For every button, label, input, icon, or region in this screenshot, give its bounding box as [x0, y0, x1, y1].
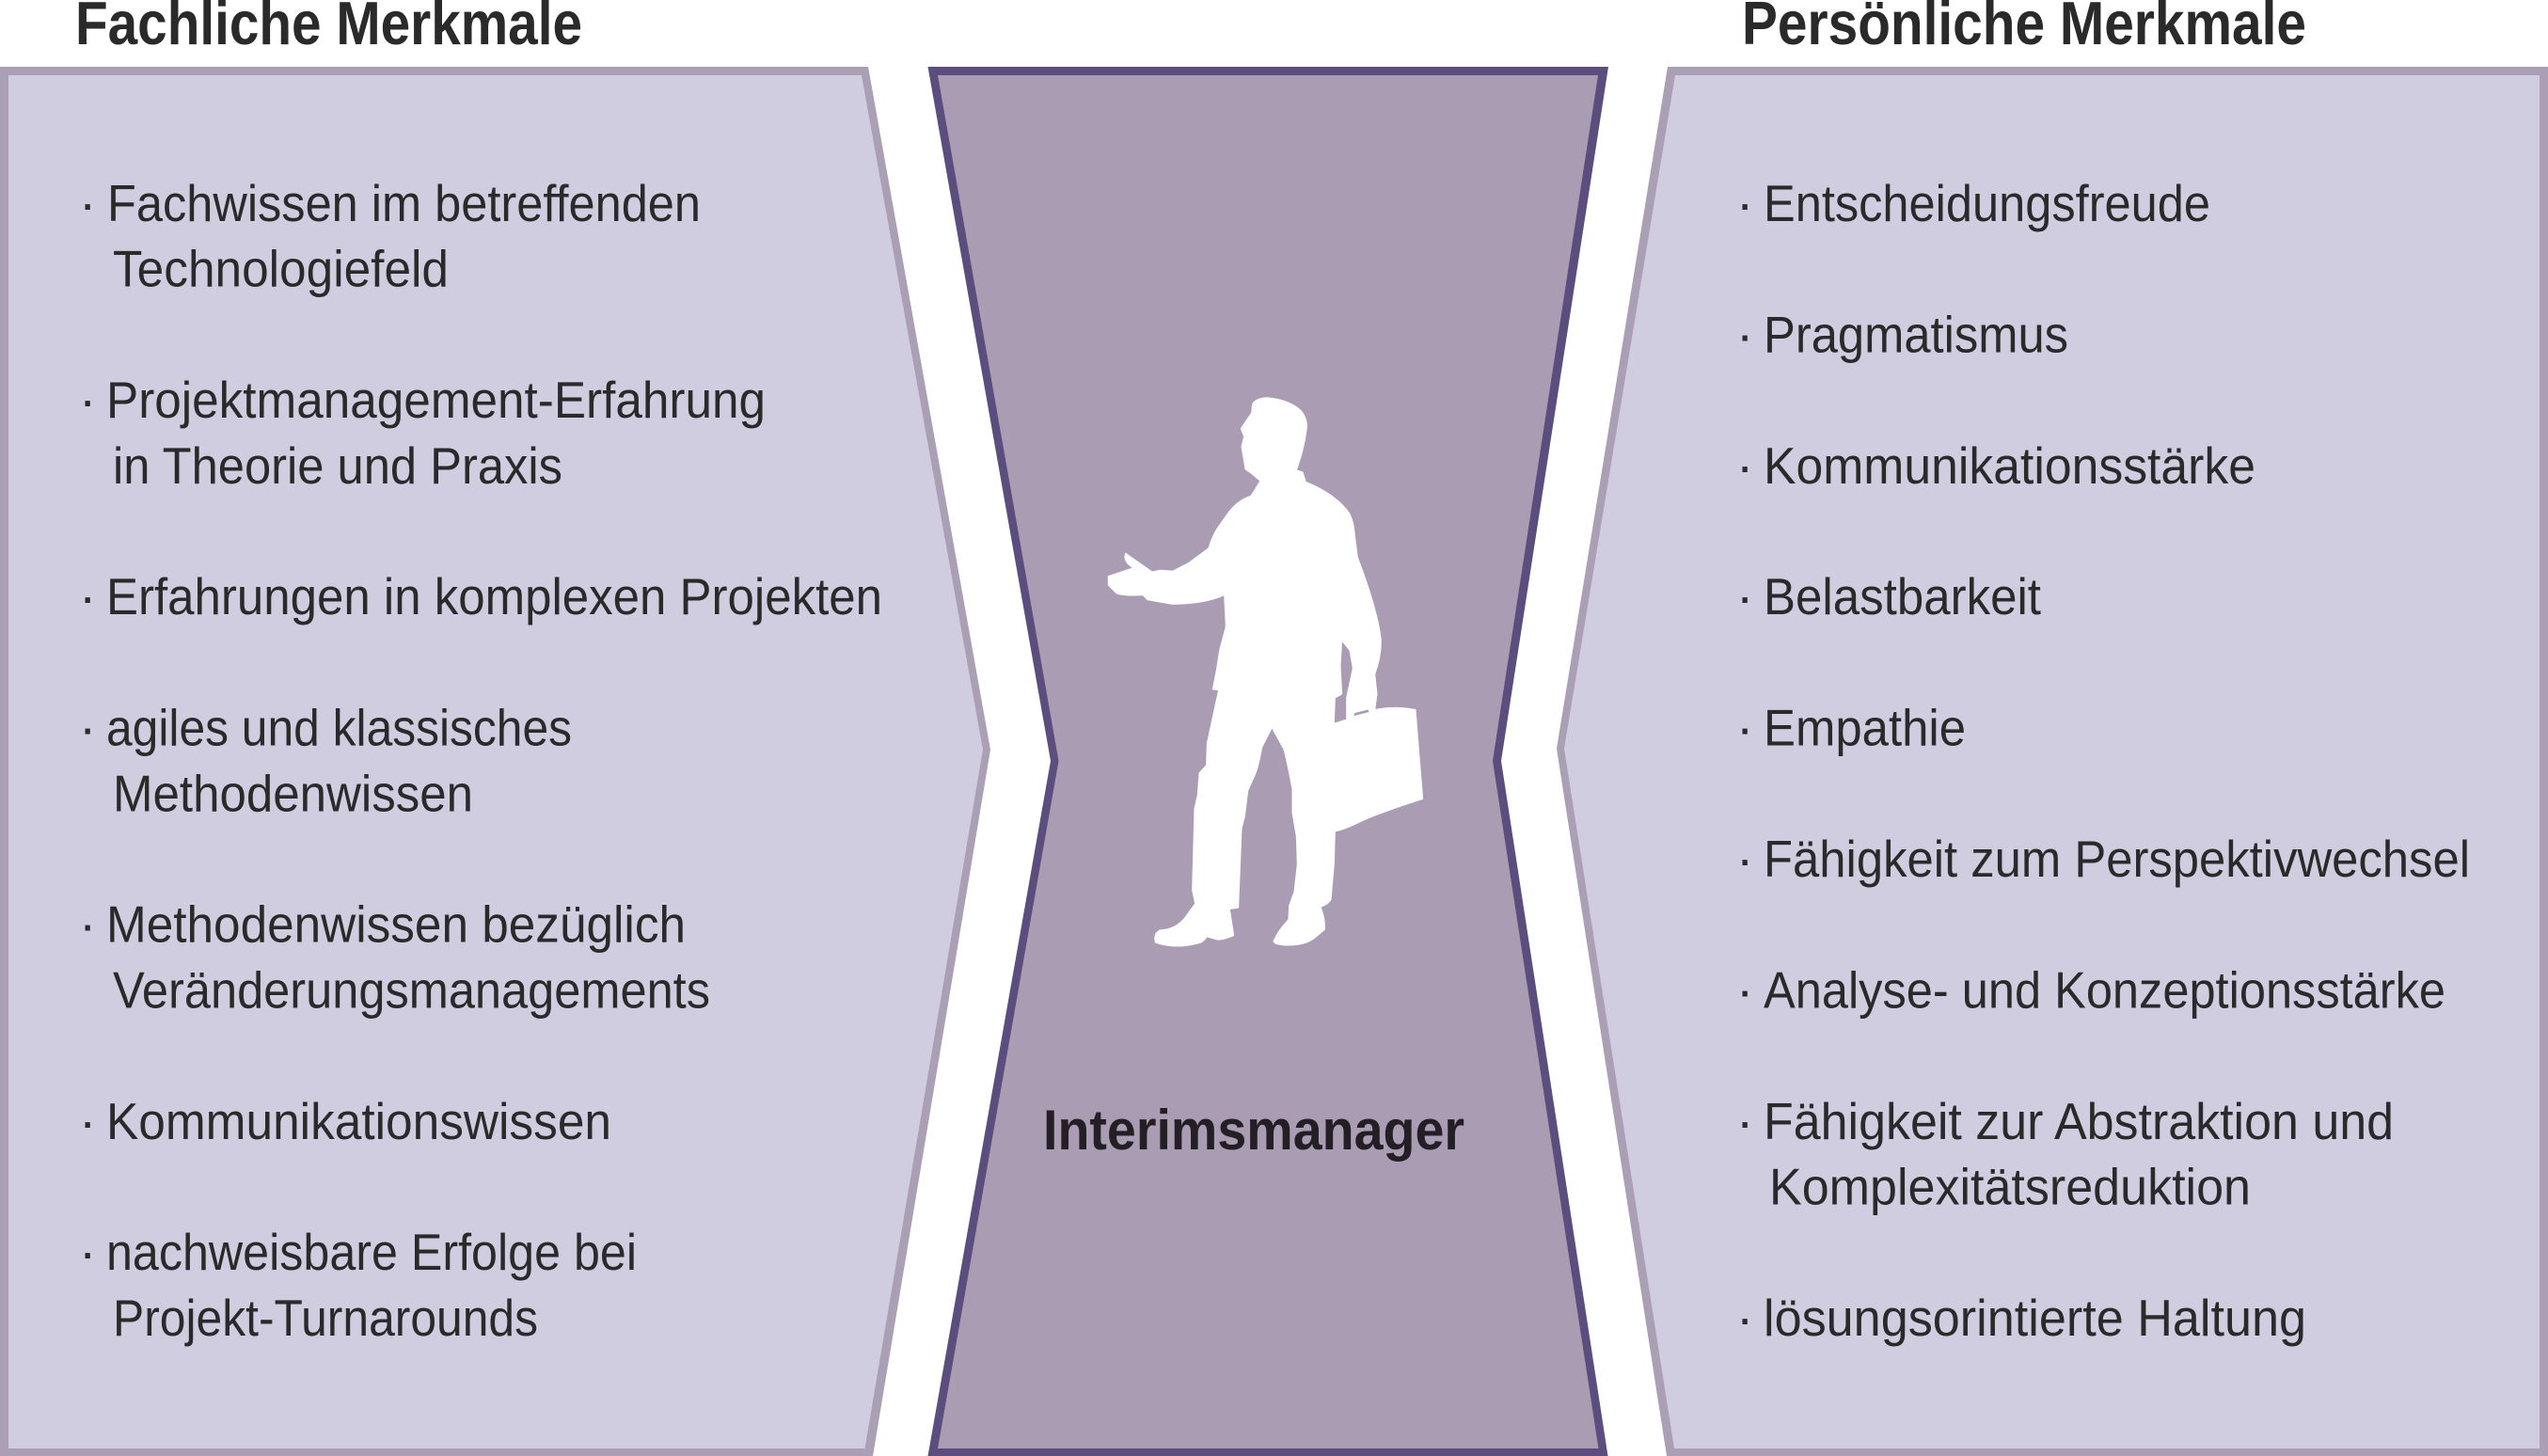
list: persönliche Merkmale [1736, 174, 2470, 1347]
item: Analyse- und Konzeptionsstärke: · [1736, 960, 1753, 1019]
item: Erfolge: · [79, 1223, 96, 1281]
item: Methodenwissen agil: · [79, 699, 96, 757]
item: Abstraktion: · [1736, 1092, 1753, 1150]
item: Abstraktion [1736, 1092, 2394, 1215]
item: Empathie: Empathie [1764, 699, 1966, 757]
item: Entscheidungsfreude: Entscheidungsfreude [1764, 174, 2210, 232]
item: Fachwissen: Technologiefeld [113, 240, 449, 298]
item: Fachwissen: · [79, 174, 96, 232]
item: Erfahrungen: Erfahrungen in komplexen Projekten [106, 567, 882, 625]
item: lösungsorientierte Haltung: lösungsorintierte Haltung [1764, 1289, 2306, 1347]
list: fachliche Merkmale [79, 174, 882, 1347]
item: Methodenwissen agil: agiles und klassisches [106, 699, 572, 757]
item: Erfolge: nachweisbare Erfolge bei [106, 1223, 637, 1281]
item: Perspektivwechsel: · [1736, 830, 1753, 888]
item: Kommunikationswissen: Kommunikationswissen [106, 1092, 611, 1150]
item: Empathie: · [1736, 699, 1753, 757]
panel: Interimsmanager centre shape [927, 67, 1608, 1456]
item: Veränderungsmanagement [79, 895, 710, 1019]
item: Projektmanagement: in Theorie und Praxis [113, 436, 562, 495]
item: Veränderungsmanagement: · [79, 895, 96, 954]
icon: businessman silhouette with briefcase [1108, 398, 1423, 946]
item: Abstraktion: Fähigkeit zur Abstraktion und [1764, 1092, 2394, 1150]
item: Pragmatismus: Pragmatismus [1764, 305, 2068, 363]
item: Erfolge [79, 1223, 637, 1347]
item: Entscheidungsfreude: · [1736, 174, 1753, 232]
item: lösungsorientierte Haltung: · [1736, 1289, 1753, 1347]
item: Kommunikationsstärke: Kommunikationsstärke [1764, 436, 2255, 495]
item: Fachwissen [79, 174, 701, 298]
item: Methodenwissen agil [79, 699, 572, 822]
item: Perspektivwechsel: Fähigkeit zum Perspektivwechsel [1764, 830, 2470, 888]
item: Kommunikationsstärke: · [1736, 436, 1753, 495]
item: Kommunikationswissen: · [79, 1092, 96, 1150]
item: Fachwissen: Fachwissen im betreffenden [107, 174, 701, 232]
panel: Persönliche Merkmale shape [1557, 67, 2548, 1456]
label: Interimsmanager: Interimsmanager [1043, 1099, 1464, 1162]
item: Analyse- und Konzeptionsstärke: Analyse- und Konzeptionsstärke [1764, 960, 2445, 1019]
item: Belastbarkeit: · [1736, 567, 1753, 625]
item: Abstraktion: Komplexitätsreduktion [1769, 1157, 2251, 1215]
item: Belastbarkeit: Belastbarkeit [1764, 567, 2041, 625]
item: Methodenwissen agil: Methodenwissen [113, 764, 473, 822]
item: Projektmanagement [79, 371, 766, 495]
item: Projektmanagement: Projektmanagement-Erfahrung [106, 371, 766, 429]
item: Veränderungsmanagement: Veränderungsmanagements [113, 960, 710, 1019]
item: Erfahrungen: · [79, 567, 96, 625]
panel: Fachliche Merkmale shape [0, 67, 990, 1456]
item: Projektmanagement: · [79, 371, 96, 429]
item: Pragmatismus: · [1736, 305, 1753, 363]
item: Veränderungsmanagement: Methodenwissen bezüglich [106, 895, 686, 954]
item: Erfolge: Projekt-Turnarounds [113, 1289, 538, 1347]
